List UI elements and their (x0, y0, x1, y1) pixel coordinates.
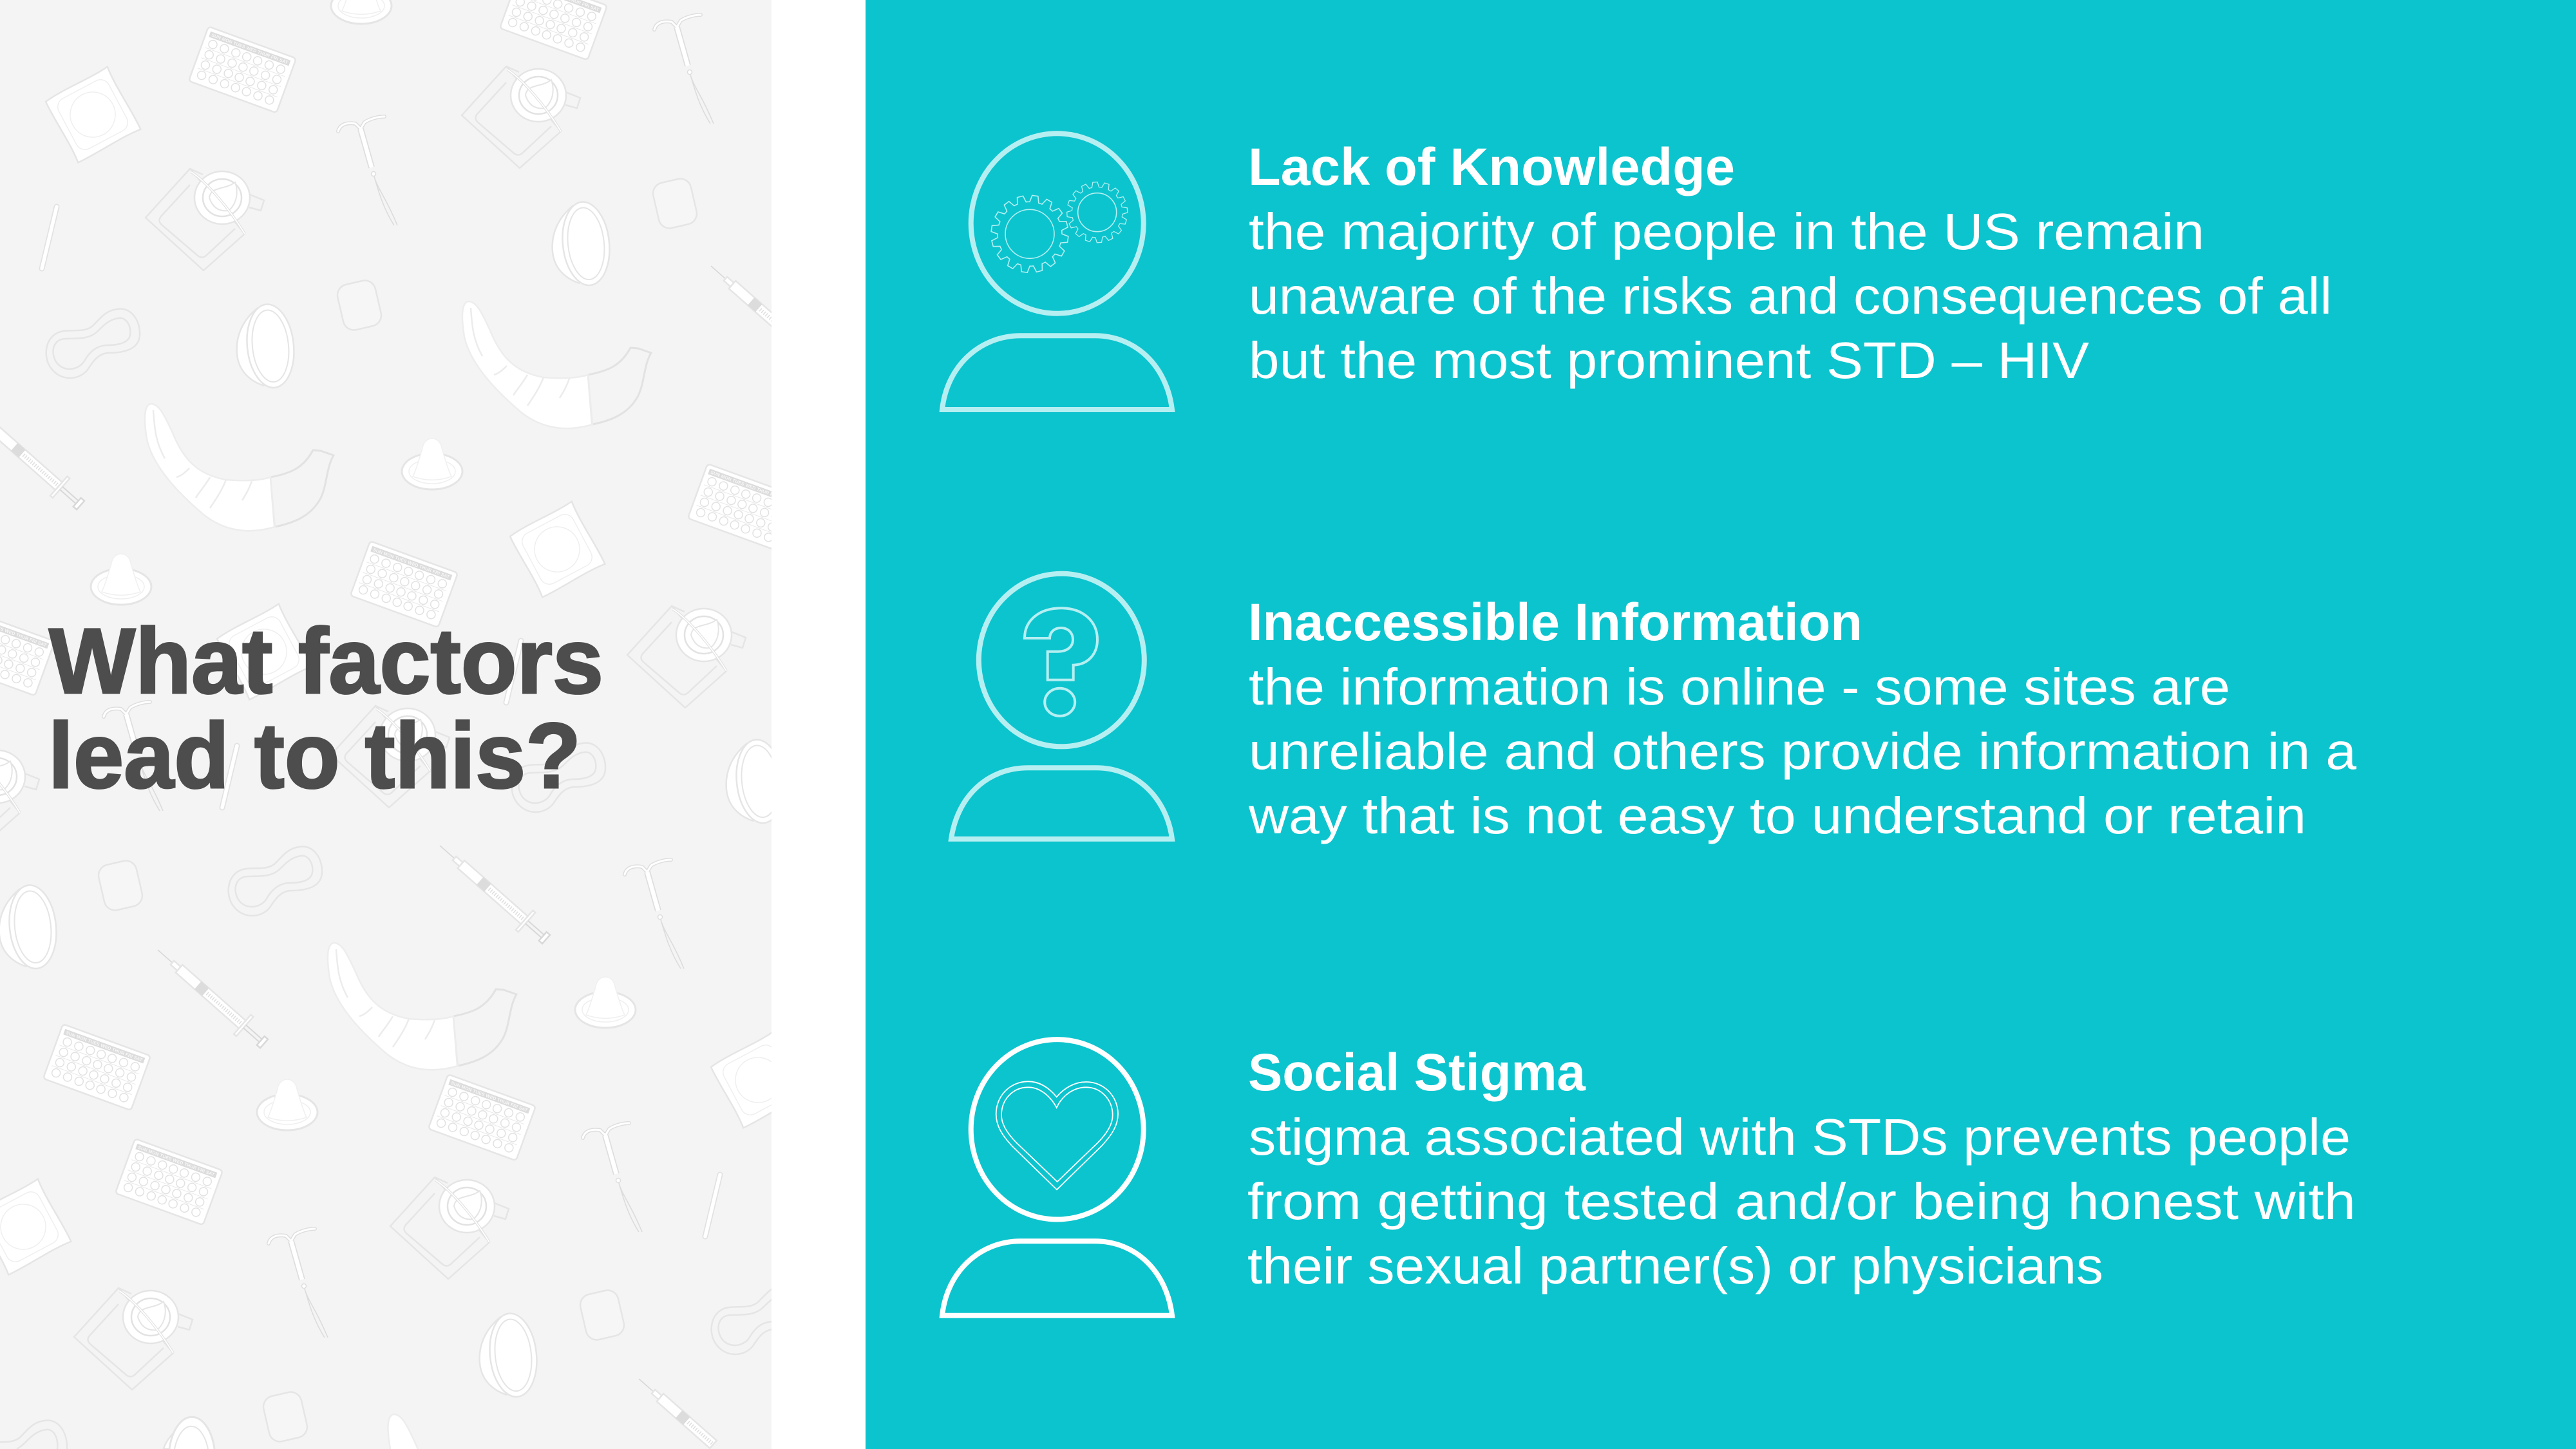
pattern: implant rods (42, 207, 720, 1236)
text block: Lack of Knowledge: Lack of Knowledge (1248, 138, 1735, 196)
pattern: diaphragm applicators (0, 66, 746, 1390)
icon: person with question mark (951, 574, 1172, 839)
title (48, 609, 603, 808)
pattern: patches (97, 176, 699, 1444)
text block: Lack of Knowledge: the majority of people in the US remain (1249, 203, 2204, 260)
pattern: contraceptive pill packs (0, 0, 795, 1225)
text block: Inaccessible Information (1248, 593, 2357, 844)
text block: Inaccessible Information: way that is not easy to understand or retain (1248, 787, 2306, 844)
text block: Social Stigma: from getting tested and/or being honest with (1247, 1173, 2356, 1230)
text block: Lack of Knowledge: unaware of the risks and consequences of all (1249, 267, 2332, 325)
text block: Lack of Knowledge (1248, 138, 2332, 389)
title: lead to this? (48, 704, 581, 808)
text block: Social Stigma: stigma associated with STDs prevents people (1249, 1108, 2351, 1166)
text block: Social Stigma (1247, 1043, 2356, 1294)
text block: Inaccessible Information: the information is online - some sites are (1249, 658, 2230, 715)
text block: Inaccessible Information: unreliable and others provide information in a (1249, 723, 2357, 780)
panel: left patterned background (0, 0, 826, 1449)
pattern: condom packets (0, 66, 806, 1275)
text block: Lack of Knowledge: but the most prominent STD – HIV (1249, 332, 2090, 389)
title: What factors (49, 609, 603, 713)
panel: teal factors panel (866, 0, 2576, 1449)
text block: Social Stigma: their sexual partner(s) or physicians (1247, 1237, 2103, 1294)
icon: person with gears (942, 133, 1172, 410)
pattern: condoms (91, 0, 636, 1130)
pattern: internal condoms (145, 301, 651, 1449)
pattern: vaginal rings (0, 308, 805, 1449)
pattern: cervical cups (0, 200, 788, 1449)
text block: Inaccessible Information: Inaccessible Information (1248, 593, 1862, 652)
pattern: syringes (0, 256, 826, 1448)
text block: Social Stigma: Social Stigma (1248, 1043, 1586, 1102)
pattern: IUDs (104, 15, 714, 1338)
icon: person with heart (942, 1039, 1172, 1316)
